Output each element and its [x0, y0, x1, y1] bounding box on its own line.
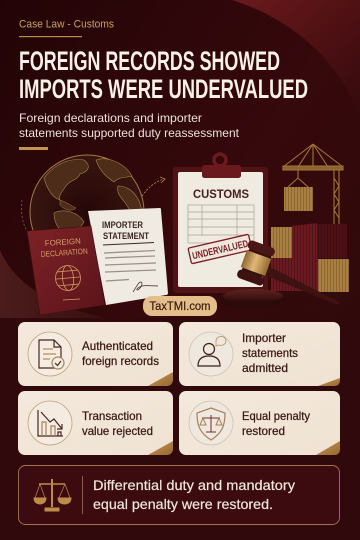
- undervalued stamp: UNDERVALUED: [191, 239, 249, 262]
- illustration: importer statement: IMPORTER: [102, 220, 143, 230]
- illustration: customs clipboard: [173, 154, 268, 293]
- subtitle: statements supported duty reassessment: [19, 126, 240, 140]
- arrow: globe to customs: [142, 177, 165, 196]
- subtitle: [19, 111, 240, 140]
- card: transaction value rejected: value rejected: [82, 424, 153, 438]
- card: equal penalty restored: [179, 391, 340, 455]
- form table: [188, 205, 254, 243]
- eyebrow label: Case Law - Customs: [19, 18, 114, 30]
- website pill: TaxTMI.com: [150, 301, 210, 313]
- icon: falling chart: [38, 410, 63, 436]
- illustration: importer statement: STATEMENT: [103, 231, 149, 241]
- icon: shield with scales: [197, 408, 225, 440]
- illustration: foreign declaration book: [27, 226, 105, 315]
- card: authenticated foreign records: [18, 322, 173, 386]
- illustration: foreign declaration book: FOREIGN: [45, 236, 81, 248]
- illustration: port crane: [283, 144, 343, 226]
- card: importer statements admitted: Importer: [242, 331, 286, 345]
- illustration: shipping containers: [271, 187, 349, 292]
- card: importer statements admitted: [179, 322, 340, 386]
- subtitle: Foreign declarations and importer: [19, 111, 202, 125]
- card: transaction value rejected: [18, 391, 173, 455]
- icon: scales of justice: [34, 479, 71, 511]
- eyebrow label: [19, 18, 114, 37]
- illustration: gavel: [220, 239, 340, 308]
- accent rule: [19, 147, 48, 150]
- customs heading: CUSTOMS: [193, 187, 249, 201]
- illustration: foreign declaration book: DECLARATION: [41, 247, 88, 259]
- card: importer statements admitted: admitted: [242, 361, 288, 375]
- card: importer statements admitted: statements: [242, 346, 298, 360]
- card: transaction value rejected: Transaction: [82, 409, 142, 423]
- callout text: Differential duty and mandatory: [93, 477, 295, 493]
- illustration: importer statement: [88, 208, 168, 305]
- card: equal penalty restored: Equal penalty: [242, 409, 310, 423]
- illustration: globe: [21, 155, 144, 269]
- icon: person speaking: [198, 336, 226, 366]
- card: authenticated foreign records: Authenticated: [82, 339, 153, 353]
- icon: document check: [39, 340, 64, 369]
- card: equal penalty restored: restored: [242, 424, 285, 438]
- callout: conclusion: [18, 466, 340, 524]
- website pill: [143, 296, 217, 316]
- callout text: equal penalty were restored.: [93, 496, 273, 512]
- title: [19, 46, 308, 104]
- card: authenticated foreign records: foreign records: [82, 354, 159, 368]
- callout text: [93, 477, 295, 512]
